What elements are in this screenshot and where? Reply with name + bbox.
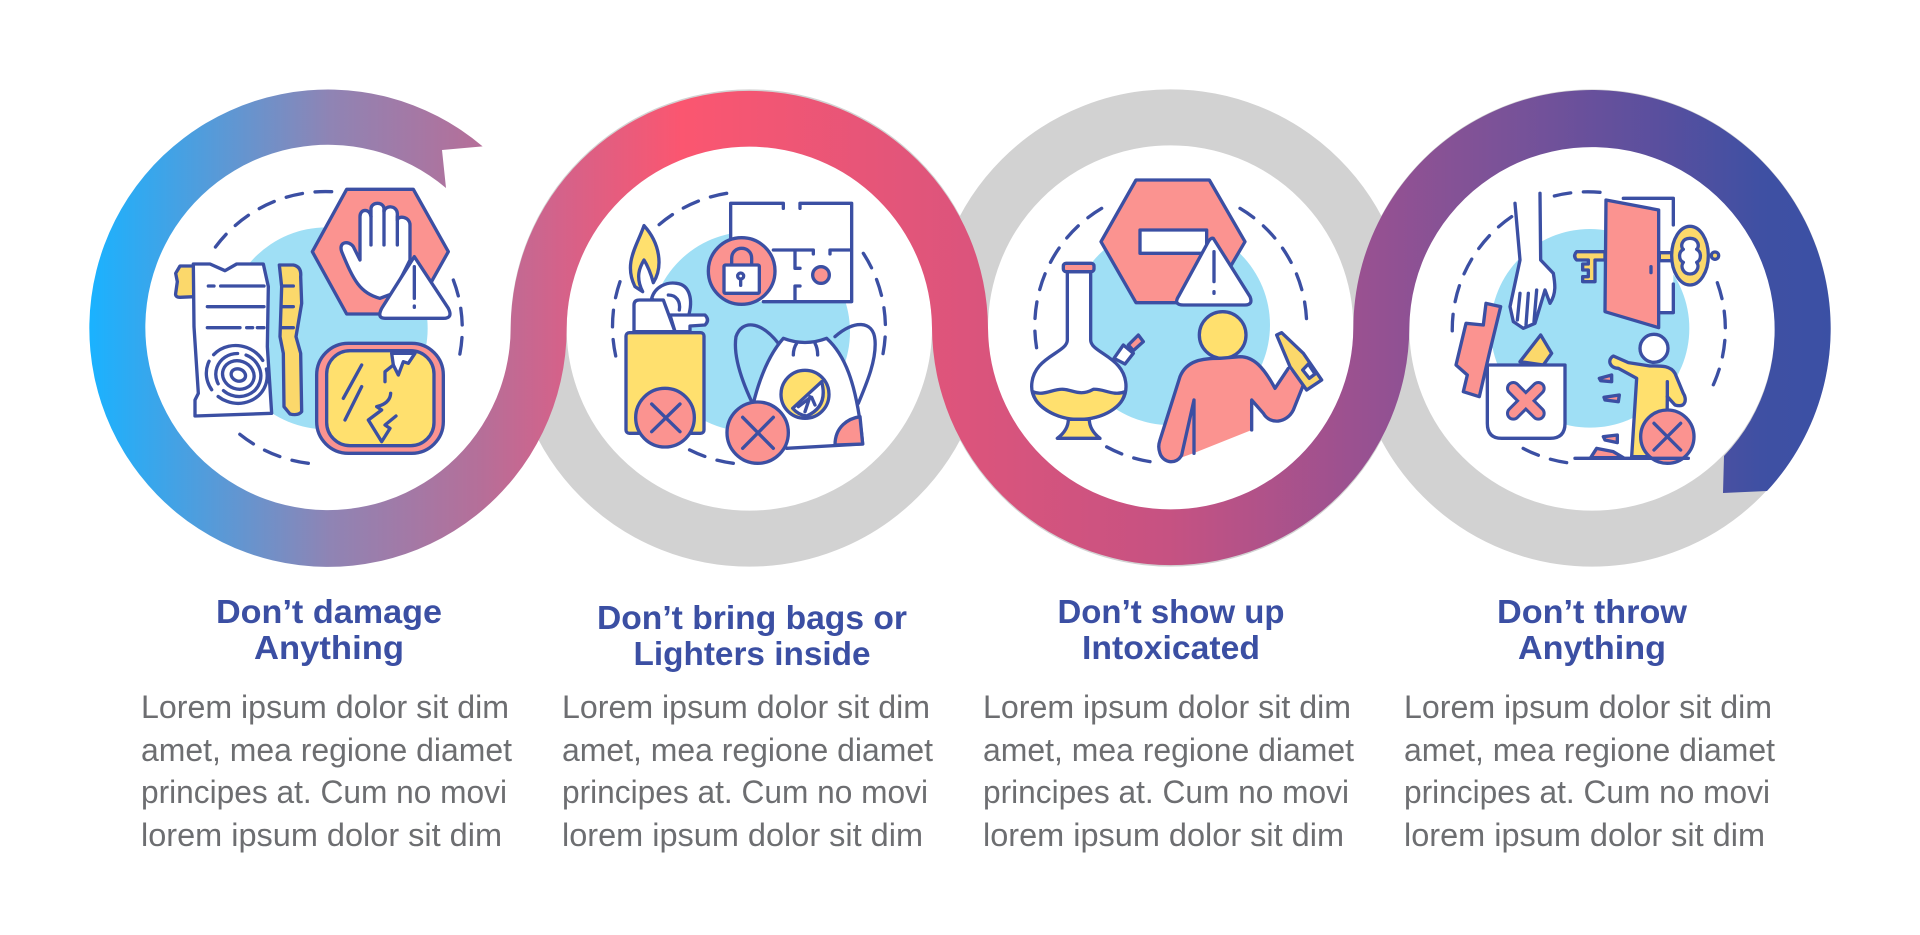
heading: don't show up intoxicated: Intoxicated xyxy=(1082,629,1260,666)
heading: don't damage anything xyxy=(216,593,442,666)
body text column 4: lorem ipsum dolor sit dim xyxy=(1404,817,1765,853)
body text column 1 xyxy=(141,689,512,853)
body text column 3: lorem ipsum dolor sit dim xyxy=(983,817,1344,853)
body text column 4: principes at. Cum no movi xyxy=(1404,774,1770,810)
heading: don't bring bags or lighters inside xyxy=(597,599,907,672)
body text column 2: lorem ipsum dolor sit dim xyxy=(562,817,923,853)
heading: don't bring bags or lighters inside: Don’t bring bags or xyxy=(597,599,907,636)
icon: don't bring bags or lighters xyxy=(612,193,885,463)
icon: don't damage anything xyxy=(176,189,462,463)
heading: don't throw anything: Don’t throw xyxy=(1497,593,1687,630)
body text column 3: amet, mea regione diamet xyxy=(983,732,1354,768)
gradient ribbon arrow xyxy=(89,90,1831,567)
heading: don't bring bags or lighters inside: Lighters inside xyxy=(634,635,870,672)
gray background rings xyxy=(539,117,1803,539)
body text column 3: Lorem ipsum dolor sit dim xyxy=(983,689,1351,725)
body text column 2 xyxy=(562,689,933,853)
heading: don't damage anything: Don’t damage xyxy=(216,593,442,630)
body text column 1: lorem ipsum dolor sit dim xyxy=(141,817,502,853)
body text column 1: Lorem ipsum dolor sit dim xyxy=(141,689,509,725)
body text column 4: Lorem ipsum dolor sit dim xyxy=(1404,689,1772,725)
heading: don't damage anything: Anything xyxy=(254,629,404,666)
body text column 1: amet, mea regione diamet xyxy=(141,732,512,768)
icon: don't show up intoxicated xyxy=(1032,180,1322,462)
heading: don't throw anything xyxy=(1497,593,1687,666)
body text column 2: Lorem ipsum dolor sit dim xyxy=(562,689,930,725)
heading: don't show up intoxicated xyxy=(1058,593,1284,666)
heading: don't throw anything: Anything xyxy=(1518,629,1666,666)
body text column 2: amet, mea regione diamet xyxy=(562,732,933,768)
body text column 3: principes at. Cum no movi xyxy=(983,774,1349,810)
heading: don't show up intoxicated: Don’t show up xyxy=(1058,593,1284,630)
body text column 1: principes at. Cum no movi xyxy=(141,774,507,810)
body text column 4 xyxy=(1404,689,1775,853)
body text column 2: principes at. Cum no movi xyxy=(562,774,928,810)
body text column 4: amet, mea regione diamet xyxy=(1404,732,1775,768)
icon: don't throw anything xyxy=(1452,192,1725,463)
body text column 3 xyxy=(983,689,1354,853)
